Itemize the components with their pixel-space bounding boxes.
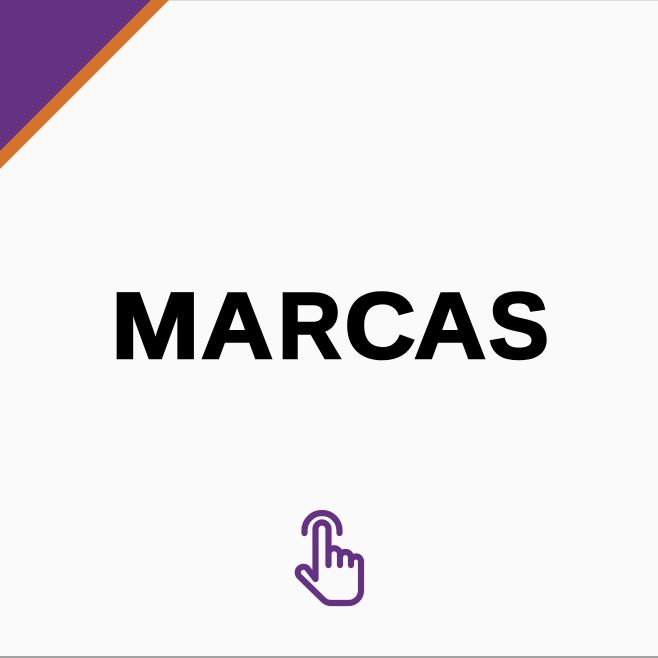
title: C (344, 274, 416, 378)
icon: pointing hand tap (298, 513, 361, 603)
title (111, 273, 549, 379)
title: A (414, 273, 486, 378)
title: S (488, 274, 549, 378)
title: R (278, 274, 341, 379)
title: M (111, 274, 200, 379)
title: A (201, 273, 273, 378)
corner ribbon: orange and purple triangle (0, 0, 169, 169)
